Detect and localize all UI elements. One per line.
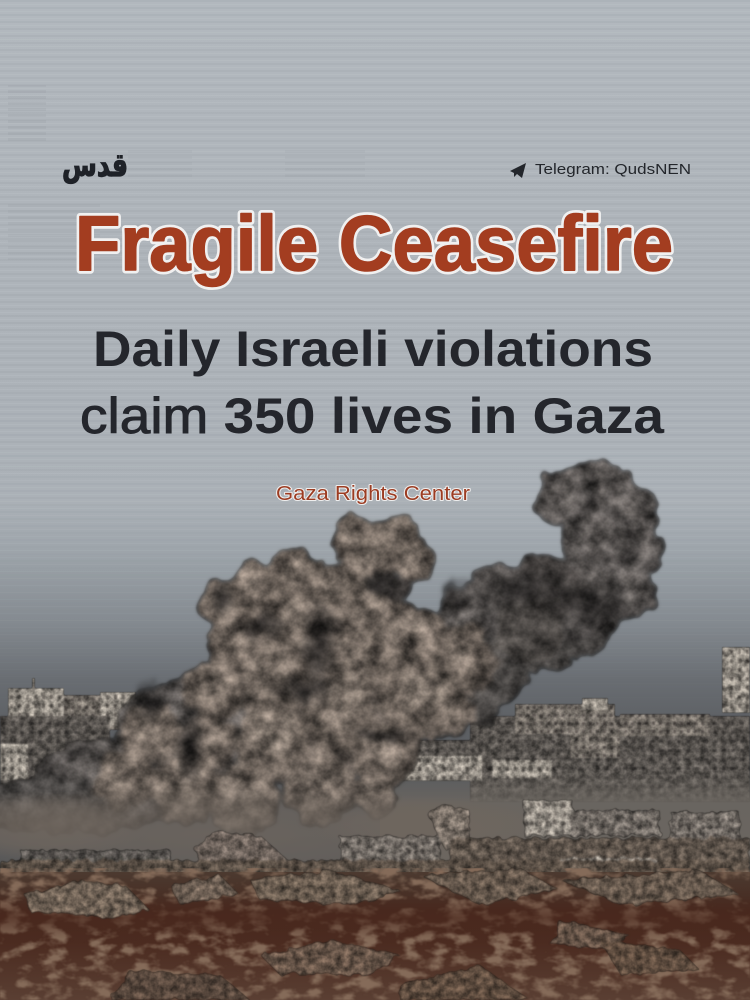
source line: Gaza Rights Center [276,483,470,505]
distant city skyline left [0,678,136,790]
title: Fragile Ceasefire [75,199,673,287]
icon: telegram paper plane [510,163,526,178]
subtitle: claim 350 lives in Gaza [80,388,665,444]
smoke plume [0,460,664,836]
haze band behind ruins [380,772,750,862]
dust cloud at ground level [0,783,550,887]
logo: Quds wordmark: قدس [62,146,128,184]
telegram credit: Telegram: QudsNEN [535,161,691,178]
ruined mid-ground buildings [0,800,750,890]
subtitle: Daily Israeli violations [93,321,653,377]
rubble ground [0,868,750,1000]
title: Fragile Ceasefire [75,199,673,287]
subtitle [80,321,665,444]
distant city skyline right [398,647,750,802]
